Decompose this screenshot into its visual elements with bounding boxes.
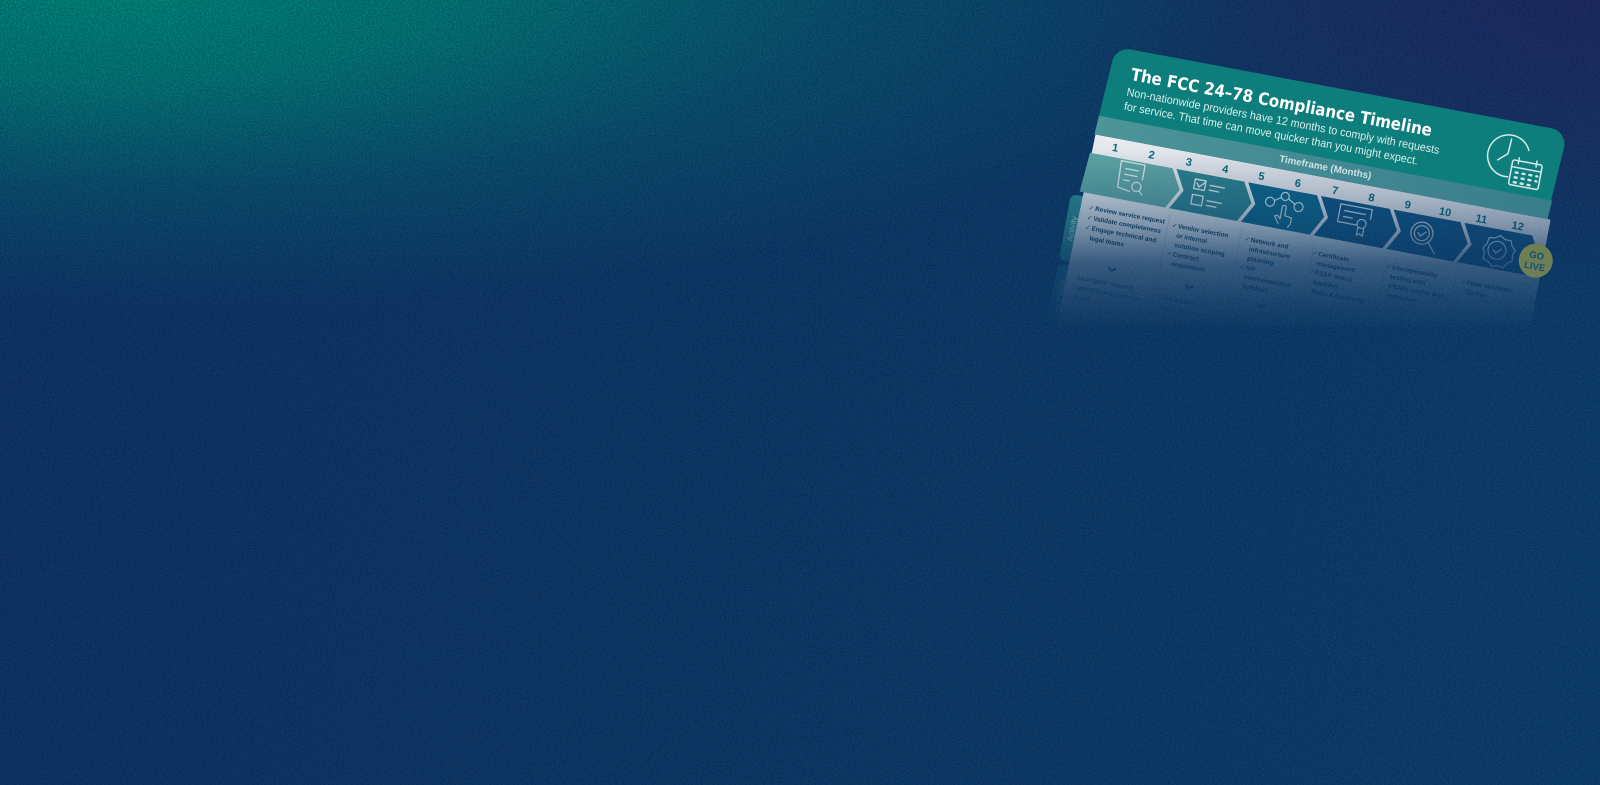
activity: step 3: Network and	[1250, 237, 1289, 251]
timeframe band	[1094, 116, 1552, 219]
pain point: step 2: vendor delays	[1156, 304, 1196, 318]
pain point: step 2: Contract and	[1158, 294, 1196, 308]
activity: step 4: ✓	[1312, 250, 1318, 258]
subtitle: Non-nationwide providers have 12 months to comply with requests	[1126, 87, 1441, 157]
activity: step 3: infrastructure	[1248, 246, 1291, 261]
side tab: pain points	[1054, 265, 1068, 311]
activity column text	[1086, 206, 1512, 303]
month strip: 5	[1257, 170, 1266, 183]
activity: step 6: Go-live	[1465, 289, 1488, 300]
activity: step 1: Engage technical and	[1091, 225, 1157, 244]
go live badge: LIVE	[1523, 260, 1546, 274]
activity: step 5: ✓	[1385, 263, 1392, 271]
activity: step 2: negotiation	[1170, 261, 1205, 274]
icons: step glyphs	[1115, 161, 1518, 270]
icon: document search	[1116, 161, 1147, 195]
activity: step 3: planning	[1247, 255, 1274, 267]
activity: step 4: Rollout readiness	[1311, 288, 1365, 305]
month strip: 10	[1438, 205, 1452, 220]
activity: step 3: buildout	[1241, 283, 1268, 295]
pain point: step 1: PSAP	[1072, 294, 1090, 304]
activity: step 2: or internal	[1175, 233, 1208, 245]
activity: step 5: testing with	[1390, 274, 1426, 287]
activity: step 1: legal teams	[1089, 235, 1125, 249]
pain point markers	[1106, 267, 1267, 308]
activity: step 4: ✓	[1308, 269, 1315, 276]
side tab: pain points: Pain Points	[1051, 279, 1067, 320]
activity: step 1: ✓	[1084, 224, 1091, 232]
activity: step 5: validation	[1386, 292, 1417, 305]
month strip: 9	[1404, 199, 1412, 212]
icon: badge check	[1482, 235, 1516, 268]
activity: step 4: tracking	[1312, 279, 1338, 291]
month strip: 3	[1185, 156, 1193, 169]
icon: network touch	[1264, 192, 1304, 228]
activity: step 2: ✓	[1166, 250, 1173, 258]
subtitle: for service. That time can move quicker than you might expect.	[1123, 101, 1419, 168]
pain point: step 1: need follow-up with the	[1074, 284, 1140, 303]
card header	[1099, 46, 1567, 202]
activity: step 4: Certificate	[1318, 251, 1350, 264]
activity: step 3: ✓	[1244, 236, 1251, 244]
faded lower card	[1054, 134, 1550, 313]
month strip: 2	[1147, 149, 1156, 162]
month strip	[1111, 142, 1525, 234]
illustration: compliance timeline card	[1054, 49, 1564, 313]
solid card top	[1083, 46, 1577, 280]
icon: clock and calendar	[1483, 131, 1547, 190]
activity: step 5: PSAPs and/or test	[1388, 283, 1444, 300]
activity: step 6: ✓	[1460, 278, 1467, 286]
step 2 chevron	[1169, 169, 1255, 223]
activity: step 1: ✓	[1088, 205, 1095, 212]
activity: step 5: Interoperability	[1391, 264, 1438, 280]
month strip: 8	[1367, 192, 1376, 205]
activity: step 3: SIP	[1245, 265, 1257, 274]
step 6 chevron	[1457, 222, 1535, 275]
chevron timeline	[1080, 152, 1543, 277]
card body	[1060, 134, 1550, 314]
activity: step 2: solution scoping	[1174, 242, 1225, 258]
icon: certificate	[1336, 204, 1372, 237]
month strip: 6	[1294, 177, 1302, 190]
activity: step 2: Vendor selection	[1177, 223, 1229, 240]
activity: step 2: ✓	[1171, 222, 1178, 230]
step 3 chevron	[1241, 182, 1328, 237]
activity: step 1: Review service request	[1095, 206, 1166, 226]
icon: checklist	[1191, 179, 1225, 209]
activity: step 6: Final validation	[1466, 279, 1513, 295]
activity: step 4: PSAP status	[1314, 270, 1353, 284]
side tab: activity	[1060, 195, 1083, 262]
activity: step 2: Contract	[1172, 251, 1200, 263]
pain point text	[1074, 275, 1194, 313]
step 5 chevron	[1386, 210, 1471, 263]
activity: step 4: management	[1316, 260, 1357, 275]
activity: step 1: Validate completeness	[1093, 216, 1162, 235]
activity: step 3: ✓	[1239, 263, 1245, 271]
month strip: 4	[1221, 163, 1230, 176]
icon: magnifier check	[1410, 222, 1435, 254]
pain point: step 1: Incomplete requests	[1076, 275, 1134, 292]
go live badge	[1516, 241, 1556, 280]
month strip: 1	[1111, 142, 1119, 155]
title: The FCC 24–78 Compliance Timeline	[1129, 65, 1434, 141]
month strip: 7	[1331, 185, 1339, 198]
activity: step 3: interconnection	[1243, 274, 1292, 290]
activity: step 1: ✓	[1086, 214, 1093, 222]
go live badge: GO	[1528, 249, 1545, 263]
side tab: activity: Activity	[1065, 216, 1079, 242]
step 4 chevron	[1314, 196, 1401, 250]
timeframe band: Timeframe (Months)	[1278, 154, 1372, 182]
column dividers	[1160, 214, 1388, 265]
month strip: 12	[1511, 220, 1525, 234]
month strip: 11	[1475, 213, 1488, 227]
step 1 chevron	[1080, 152, 1183, 210]
